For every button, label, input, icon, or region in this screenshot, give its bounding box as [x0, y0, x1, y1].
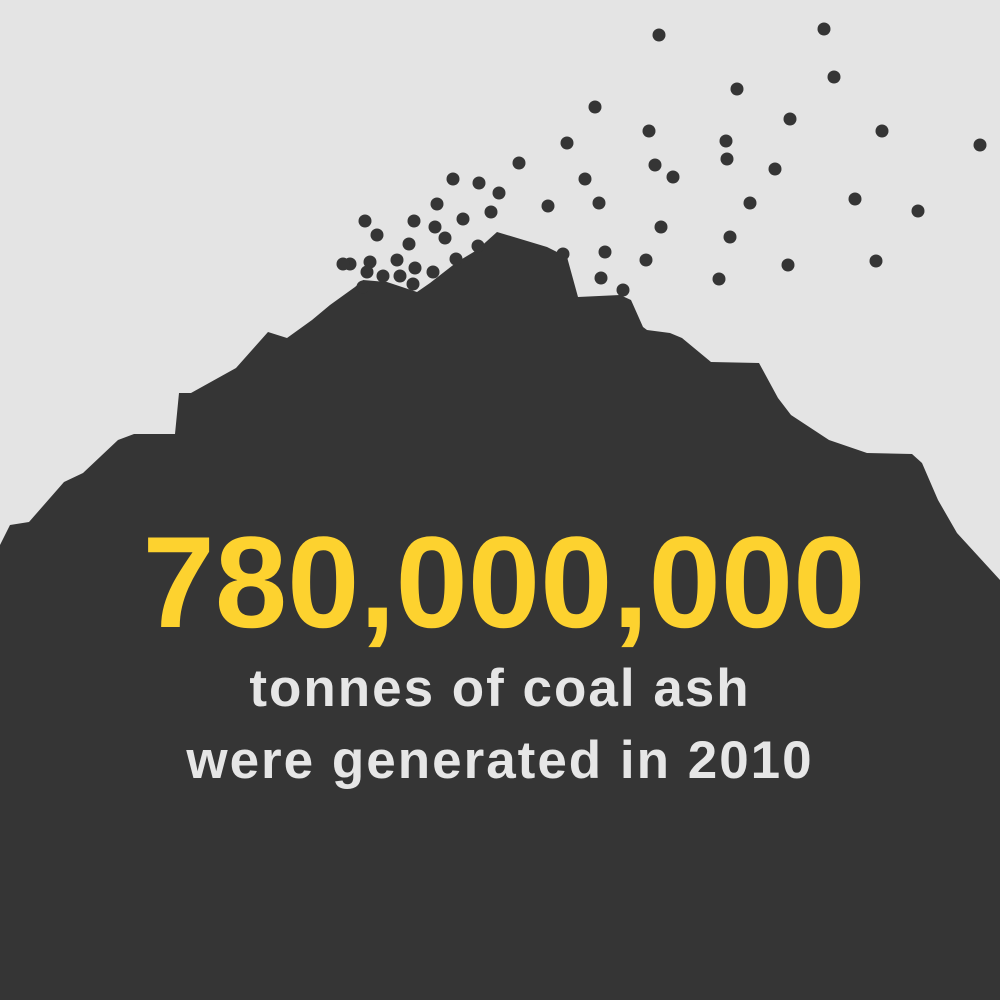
caption: were generated in 2010 [185, 731, 814, 790]
mountain silhouette [0, 232, 1000, 1000]
caption: tonnes of coal ash [249, 659, 751, 718]
caption [185, 659, 814, 790]
headline number: 780,000,000 [143, 509, 865, 655]
ash particles [336, 22, 986, 296]
